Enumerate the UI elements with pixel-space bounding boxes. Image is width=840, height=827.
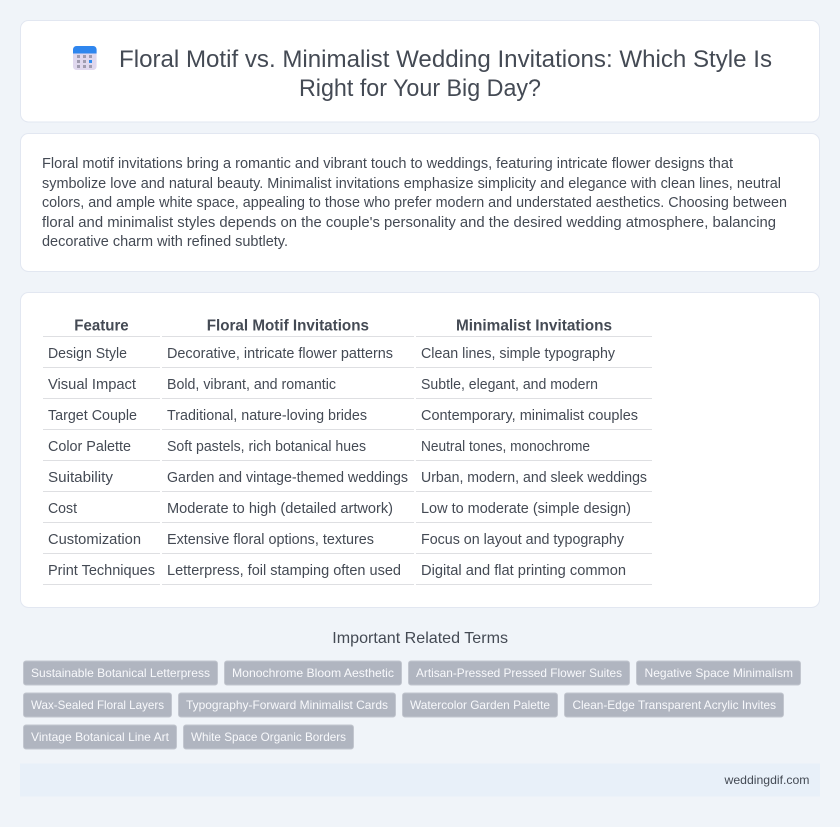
text block: introduction paragraph: floral and minimalist styles depends on the couple's personality and the desired wedding atmosphere, balancing [42, 215, 776, 231]
row: color palette: Soft pastels, rich botanical hues [167, 439, 366, 455]
row: visual impact: Visual Impact [48, 377, 136, 393]
footer source text: weddingdif.com [723, 773, 810, 787]
row: customization: Focus on layout and typography [421, 532, 625, 548]
chip [184, 725, 354, 749]
row: suitability: Garden and vintage-themed weddings [167, 470, 408, 486]
title: Floral Motif vs. Minimalist Wedding Invitations: Which Style Is [119, 46, 772, 73]
row: color palette [48, 439, 590, 455]
chip: Watercolor Garden Palette [410, 698, 550, 712]
row: design style [48, 346, 616, 362]
chip group: related terms [24, 661, 800, 749]
chip: White Space Organic Borders [191, 730, 346, 744]
chip [178, 693, 396, 717]
text block: introduction paragraph: decorative charm with refined subtlety. [42, 234, 288, 250]
row: print techniques: Print Techniques [48, 563, 155, 579]
row: customization: Extensive floral options, textures [167, 532, 374, 548]
row: suitability: Urban, modern, and sleek weddings [421, 470, 647, 486]
footer bar [20, 764, 820, 796]
row: target couple: Target Couple [48, 408, 137, 424]
chip: Negative Space Minimalism [644, 666, 793, 680]
row: color palette: Neutral tones, monochrome [421, 439, 590, 455]
chip [24, 661, 218, 685]
row: target couple: Contemporary, minimalist couples [421, 408, 638, 424]
chip [224, 661, 402, 685]
text block: introduction paragraph: Floral motif invitations bring a romantic and vibrant touch to weddings, featuring intricate flower designs that [42, 156, 733, 172]
title: Right for Your Big Day? [299, 75, 541, 102]
row: visual impact: Bold, vibrant, and romantic [167, 377, 336, 393]
chip [24, 693, 172, 717]
chip [408, 661, 630, 685]
panel: introduction [20, 134, 820, 272]
row: print techniques: Letterpress, foil stamping often used [167, 563, 401, 579]
row: suitability [48, 470, 647, 486]
chip [402, 693, 558, 717]
row: target couple [48, 408, 638, 424]
chip [24, 725, 176, 749]
table header: Minimalist Invitations [456, 318, 612, 334]
chip [564, 693, 784, 717]
row: customization: Customization [48, 532, 141, 548]
row: design style: Design Style [48, 346, 127, 362]
chip [636, 661, 800, 685]
chip: Wax-Sealed Floral Layers [31, 698, 164, 712]
chip: Vintage Botanical Line Art [31, 730, 170, 744]
text block: introduction paragraph [42, 156, 787, 250]
panel: header [20, 20, 820, 122]
row: design style: Decorative, intricate flower patterns [167, 346, 393, 362]
row: print techniques [48, 563, 626, 579]
row: target couple: Traditional, nature-loving brides [167, 408, 367, 424]
chip: Clean-Edge Transparent Acrylic Invites [572, 698, 776, 712]
row: cost: Cost [48, 501, 77, 517]
heading: important related terms: Important Related Terms [332, 630, 508, 647]
row: color palette: Color Palette [48, 439, 131, 455]
panel: comparison table [20, 292, 820, 608]
chip: Typography-Forward Minimalist Cards [186, 698, 388, 712]
chip: Sustainable Botanical Letterpress [31, 666, 210, 680]
row: customization [48, 532, 625, 548]
row: print techniques: Digital and flat printing common [421, 563, 626, 579]
row: cost: Low to moderate (simple design) [421, 501, 631, 517]
row: design style: Clean lines, simple typography [421, 346, 616, 362]
row: cost: Moderate to high (detailed artwork) [167, 501, 393, 517]
row: suitability: Suitability [48, 470, 114, 486]
row: visual impact: Subtle, elegant, and modern [421, 377, 598, 393]
chip: Monochrome Bloom Aesthetic [232, 666, 394, 680]
text block: introduction paragraph: colors, and ample white space, appealing to those who prefer modern and understated aesthetics. Choosing between [42, 195, 787, 211]
icon: calendar [73, 46, 97, 70]
text block: introduction paragraph: symbolize love and natural beauty. Minimalist invitations emphasize simplicity and elegance with clean lines, neutral [42, 176, 781, 192]
table header: Floral Motif Invitations [207, 318, 369, 334]
chip: Artisan-Pressed Pressed Flower Suites [416, 666, 622, 680]
table header [74, 318, 612, 334]
title [119, 46, 772, 102]
row: visual impact [48, 377, 598, 393]
row: cost [48, 501, 631, 517]
table header: Feature [74, 318, 129, 334]
